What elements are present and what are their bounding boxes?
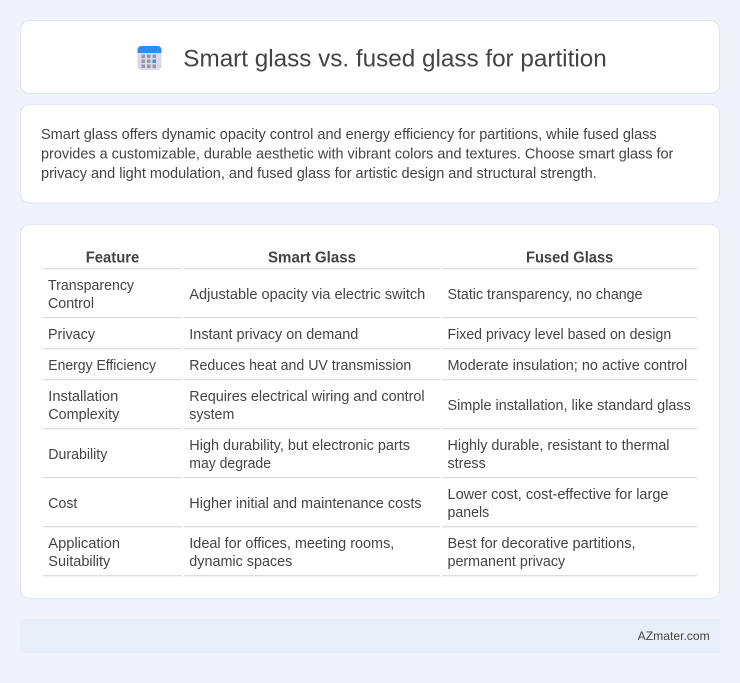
- row: cost: Cost: [48, 496, 77, 512]
- table header: Fused Glass: [526, 249, 614, 266]
- row: durability: Highly durable, resistant to thermal: [448, 438, 670, 454]
- row: cost: panels: [448, 505, 489, 521]
- row: application suitability: permanent privacy: [448, 554, 566, 570]
- row: installation complexity: system: [189, 407, 234, 423]
- row: energy efficiency: Reduces heat and UV transmission: [189, 358, 411, 374]
- row: application suitability: [48, 536, 636, 570]
- row: transparency control: [48, 278, 642, 312]
- panel: title card: [20, 20, 720, 94]
- row: transparency control: Adjustable opacity via electric switch: [189, 287, 425, 303]
- table header: Feature: [86, 249, 140, 266]
- row: privacy: Privacy: [48, 327, 96, 343]
- row: application suitability: Application: [48, 536, 120, 552]
- row: privacy: [48, 327, 671, 343]
- footer: AZmater.com: [638, 629, 710, 643]
- row: transparency control: Control: [48, 296, 94, 312]
- row: application suitability: Ideal for offices, meeting rooms,: [189, 536, 394, 552]
- row: privacy: Fixed privacy level based on design: [448, 327, 671, 343]
- row: transparency control: Static transparency, no change: [448, 287, 642, 303]
- panel: summary: [20, 104, 720, 203]
- icon: calendar: [138, 46, 162, 70]
- row: durability: High durability, but electronic parts: [189, 438, 410, 454]
- row: energy efficiency: Energy Efficiency: [48, 358, 157, 374]
- row: cost: [48, 487, 669, 521]
- table header: Smart Glass: [268, 249, 356, 266]
- row: cost: Lower cost, cost-effective for large: [448, 487, 668, 503]
- row: application suitability: Suitability: [48, 554, 111, 570]
- summary text: [41, 127, 674, 182]
- row: privacy: Instant privacy on demand: [189, 327, 358, 343]
- table header: [86, 249, 614, 266]
- row: durability: Durability: [48, 447, 108, 463]
- row: installation complexity: Complexity: [48, 407, 120, 423]
- title: Smart glass vs. fused glass for partition: [183, 46, 607, 73]
- row: application suitability: Best for decorative partitions,: [448, 536, 636, 552]
- row: installation complexity: [48, 389, 691, 423]
- row: application suitability: dynamic spaces: [189, 554, 292, 570]
- row: energy efficiency: [48, 358, 687, 374]
- row: cost: Higher initial and maintenance costs: [189, 496, 422, 512]
- row: installation complexity: Requires electrical wiring and control: [189, 389, 425, 405]
- summary text: privacy and light modulation, and fused glass for artistic design and structural strength.: [41, 166, 597, 182]
- row: energy efficiency: Moderate insulation; no active control: [448, 358, 687, 374]
- row: transparency control: Transparency: [48, 278, 135, 294]
- row: durability: may degrade: [189, 456, 271, 472]
- footer: [20, 619, 720, 653]
- row: installation complexity: Installation: [48, 389, 118, 405]
- summary text: Smart glass offers dynamic opacity control and energy efficiency for partitions, while fused glass: [41, 127, 657, 143]
- row: durability: [48, 438, 670, 472]
- row: installation complexity: Simple installation, like standard glass: [448, 398, 691, 414]
- panel: comparison table: [20, 224, 720, 598]
- summary text: provides a customizable, durable aesthetic with vibrant colors and textures. Choose smart glass for: [41, 146, 674, 162]
- row: durability: stress: [448, 456, 486, 472]
